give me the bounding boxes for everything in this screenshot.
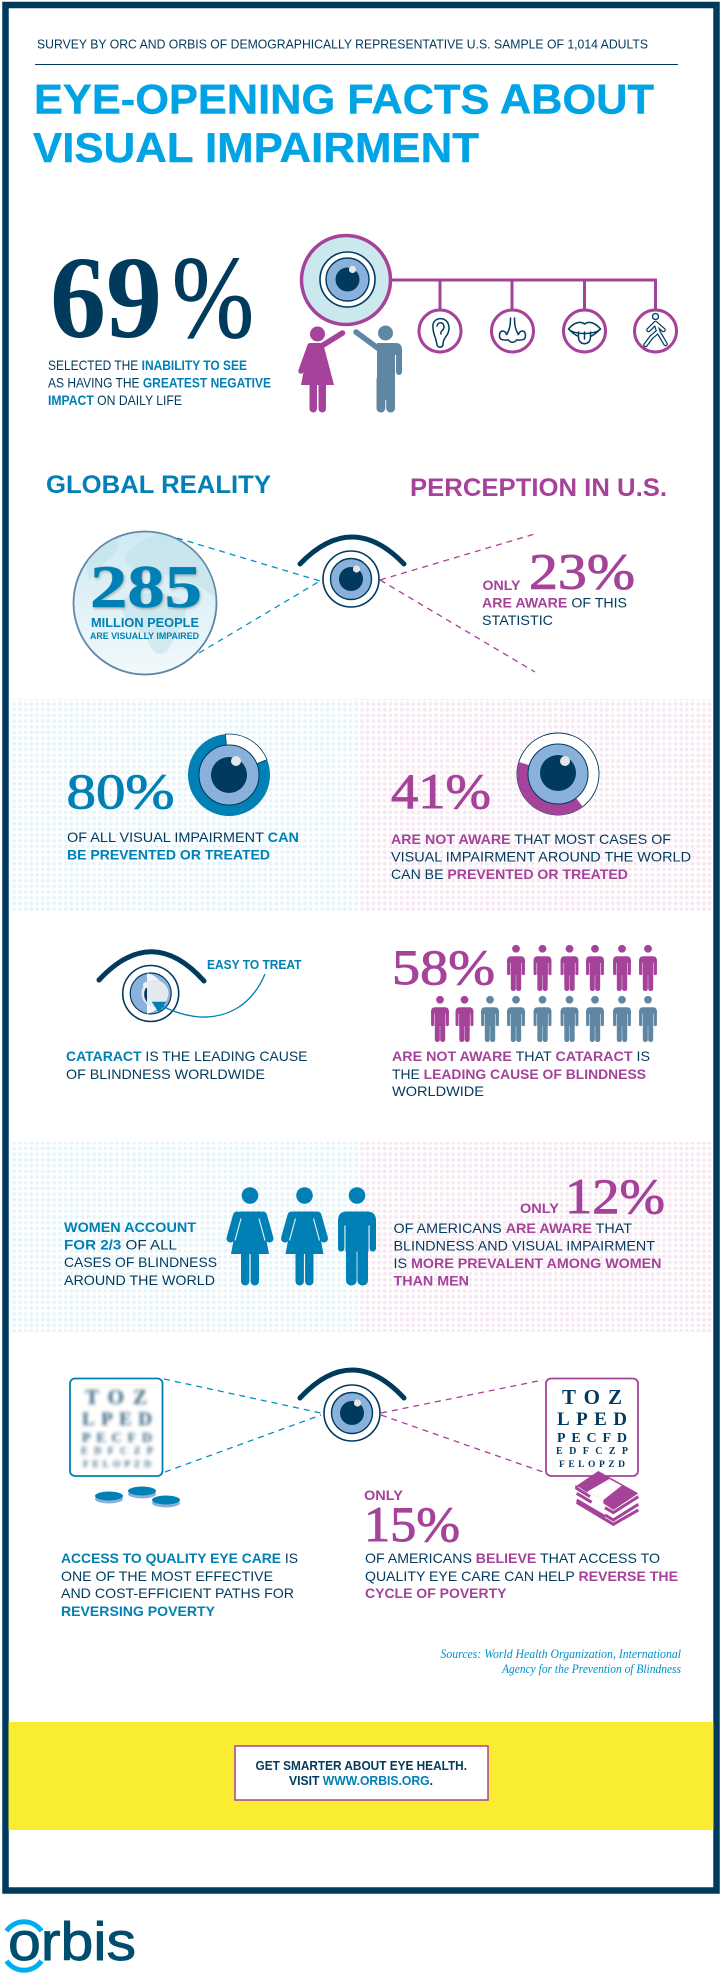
title: EYE-OPENING FACTS ABOUT xyxy=(34,76,654,122)
icon: big eye xyxy=(302,236,390,324)
sharp eye chart: EDFCZP xyxy=(556,1446,628,1457)
stat: 80 percent: 80% xyxy=(66,763,174,819)
eye care description: REVERSING POVERTY xyxy=(61,1603,216,1619)
women description: AROUND THE WORLD xyxy=(64,1272,215,1288)
cataract description: OF BLINDNESS WORLDWIDE xyxy=(66,1066,265,1082)
blurred eye chart: FELOPZD xyxy=(83,1460,151,1470)
sources: Sources: World Health Organization, International xyxy=(440,1647,681,1661)
blurred eye chart: LPED xyxy=(82,1409,152,1430)
globe: 285 million xyxy=(74,532,216,674)
description: OF AMERICANS ARE AWARE THAT xyxy=(394,1220,632,1236)
women description: FOR 2/3 OF ALL xyxy=(64,1236,177,1252)
number 69%: 69 xyxy=(50,232,162,363)
title: VISUAL IMPAIRMENT xyxy=(33,124,479,171)
description: QUALITY EYE CARE CAN HELP REVERSE THE xyxy=(365,1568,678,1584)
description: CYCLE OF POVERTY xyxy=(365,1585,507,1601)
icon: money stack xyxy=(577,1471,638,1524)
description: OF AMERICANS BELIEVE THAT ACCESS TO xyxy=(365,1550,660,1566)
description xyxy=(394,1220,662,1288)
pictogram: 58 percent of people xyxy=(431,945,657,1042)
women description xyxy=(64,1219,217,1288)
stat: 41 percent: 41% xyxy=(391,763,491,819)
eye care description: AND COST-EFFICIENT PATHS FOR xyxy=(61,1585,294,1601)
women description: CASES OF BLINDNESS xyxy=(64,1254,217,1270)
stat: 12 percent: 12% xyxy=(565,1168,665,1224)
sight lines: perception xyxy=(380,533,538,672)
sharp eye chart: LPED xyxy=(557,1409,627,1430)
label: MILLION PEOPLE xyxy=(91,615,199,630)
sight lines: eye care xyxy=(164,1379,543,1472)
description: THAN MEN xyxy=(394,1272,469,1288)
stat: 12 percent xyxy=(394,1168,665,1288)
stat: 58 percent: 58% xyxy=(392,939,495,995)
58 percent description: THE LEADING CAUSE OF BLINDNESS xyxy=(392,1066,646,1082)
icon: cataract eye xyxy=(99,952,265,1022)
icon: eye with brow xyxy=(300,537,404,607)
logo arcs xyxy=(6,1922,42,1970)
icon: walking person xyxy=(634,310,676,352)
number 69%: % xyxy=(172,232,254,363)
survey note: SURVEY BY ORC AND ORBIS OF DEMOGRAPHICALLY REPRESENTATIVE U.S. SAMPLE OF 1,014 ADULTS xyxy=(37,38,648,52)
pictogram: two women one man xyxy=(230,1187,376,1286)
callout arrow xyxy=(162,974,265,1017)
chart: 80 percent eye donut xyxy=(188,734,270,816)
description: BLINDNESS AND VISUAL IMPAIRMENT xyxy=(394,1238,655,1254)
icon: man pointing xyxy=(356,326,402,412)
stat: 23 percent: ARE AWARE OF THIS xyxy=(482,594,627,610)
icon: mouth xyxy=(564,310,606,352)
eye care description: ACCESS TO QUALITY EYE CARE IS xyxy=(61,1550,298,1566)
58 percent description: WORLDWIDE xyxy=(392,1083,484,1099)
senses diagram xyxy=(301,236,676,412)
stat: 15 percent: ONLY xyxy=(364,1487,404,1503)
58 percent description xyxy=(392,1048,650,1099)
sources xyxy=(440,1647,681,1676)
call-to-action band xyxy=(8,1722,714,1830)
description: ARE NOT AWARE THAT MOST CASES OF xyxy=(391,831,671,847)
panel: prevention perception xyxy=(361,699,712,912)
panel: prevention global xyxy=(10,699,361,912)
call-to-action text: VISIT WWW.ORBIS.ORG. xyxy=(289,1773,433,1788)
call-to-action box xyxy=(235,1746,488,1800)
description: VISUAL IMPAIRMENT AROUND THE WORLD xyxy=(391,848,691,864)
call-to-action text: GET SMARTER ABOUT EYE HEALTH. xyxy=(256,1758,467,1773)
eye care description: ONE OF THE MOST EFFECTIVE xyxy=(61,1568,273,1584)
panel: women perception xyxy=(361,1142,712,1332)
stat: 80 percent xyxy=(66,734,299,862)
sight lines: global xyxy=(177,538,320,653)
icon: nose xyxy=(492,310,534,352)
description: CAN BE PREVENTED OR TREATED xyxy=(391,866,628,882)
globe continents xyxy=(87,532,216,654)
connector tree xyxy=(391,280,656,310)
description xyxy=(391,831,691,882)
icon: eye with brow xyxy=(300,1370,404,1441)
women description: WOMEN ACCOUNT xyxy=(64,1219,196,1235)
stat: 23 percent: STATISTIC xyxy=(482,612,553,628)
icon: ear xyxy=(419,310,461,352)
stat: 69 percent xyxy=(48,232,271,408)
blurred eye chart xyxy=(70,1378,162,1476)
sources: Agency for the Prevention of Blindness xyxy=(501,1662,681,1676)
eye care description xyxy=(61,1550,298,1619)
description: OF ALL VISUAL IMPAIRMENT CAN xyxy=(67,829,299,845)
logo: orbis: orbis xyxy=(8,1912,136,1972)
description xyxy=(67,829,299,862)
description xyxy=(365,1550,678,1601)
chart: 41 percent eye donut xyxy=(517,733,599,815)
sharp eye chart: TOZ xyxy=(562,1385,622,1409)
stat: 15 percent: 15% xyxy=(364,1496,460,1552)
blurred eye chart: EDFCZP xyxy=(81,1446,153,1457)
description: BE PREVENTED OR TREATED xyxy=(67,846,270,862)
number 285: 285 xyxy=(90,554,202,620)
58 percent description: ARE NOT AWARE THAT CATARACT IS xyxy=(392,1048,650,1064)
sharp eye chart xyxy=(546,1378,638,1476)
cataract description xyxy=(66,1048,308,1082)
stat: 41 percent xyxy=(391,733,691,882)
stat description: AS HAVING THE GREATEST NEGATIVE xyxy=(48,374,271,390)
title xyxy=(33,76,654,171)
blurred eye chart: PECFD xyxy=(82,1431,152,1446)
stat: 23 percent: ONLY xyxy=(482,577,521,593)
panel: women global xyxy=(10,1142,361,1332)
stat description: SELECTED THE INABILITY TO SEE xyxy=(48,357,247,373)
stat description: IMPACT ON DAILY LIFE xyxy=(48,392,182,408)
heading: global reality: GLOBAL REALITY xyxy=(46,471,271,499)
number 69% xyxy=(50,232,254,363)
heading: perception in US: PERCEPTION IN U.S. xyxy=(410,474,667,502)
pills xyxy=(95,1486,180,1508)
stat: 12 percent: ONLY xyxy=(520,1200,560,1216)
stat: 23 percent xyxy=(482,545,635,628)
icon: woman pointing xyxy=(301,326,342,412)
stat: 15 percent xyxy=(364,1487,678,1601)
sharp eye chart: FELOPZD xyxy=(559,1460,625,1470)
number 23%: 23% xyxy=(529,545,635,601)
stat description xyxy=(48,357,271,408)
sharp eye chart: PECFD xyxy=(557,1431,627,1446)
cataract description: CATARACT IS THE LEADING CAUSE xyxy=(66,1048,308,1064)
callout: easy to treat: EASY TO TREAT xyxy=(207,957,302,972)
call-to-action text xyxy=(256,1758,467,1788)
description: IS MORE PREVALENT AMONG WOMEN xyxy=(394,1255,662,1271)
globe: 285 million: ARE VISUALLY IMPAIRED xyxy=(90,631,199,642)
blurred eye chart: TOZ xyxy=(85,1385,147,1409)
